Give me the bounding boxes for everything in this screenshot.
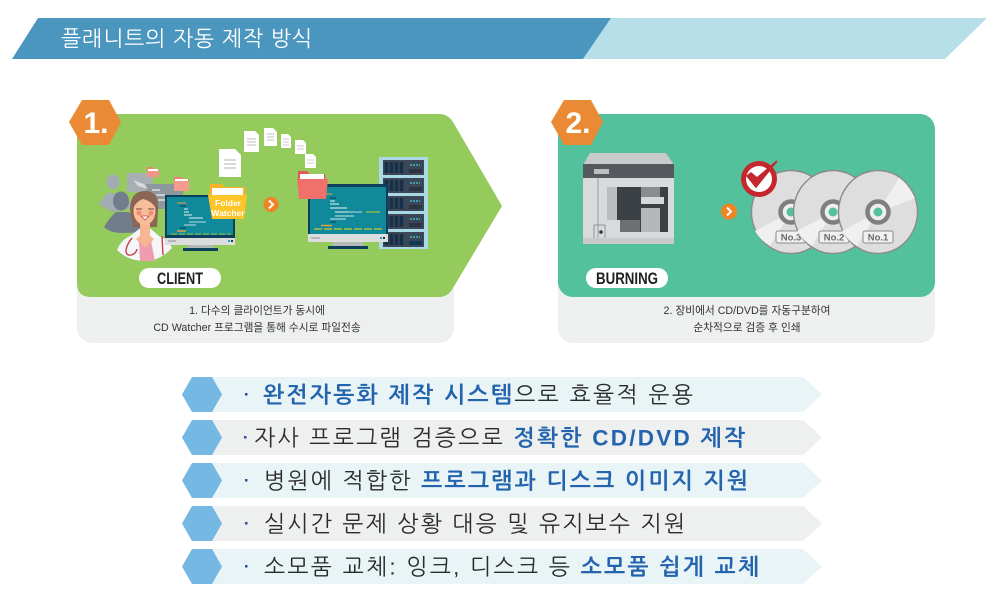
icon: doctor (117, 191, 172, 261)
label: burning: BURNING (596, 270, 658, 288)
icon: client silhouettes (99, 174, 150, 233)
icon: arrow (721, 204, 737, 220)
label: client (139, 268, 221, 288)
benefit row 3 (182, 463, 822, 498)
icon: client monitor (165, 195, 235, 251)
benefit row 5 (182, 549, 822, 584)
benefit row 4: 실시간 문제 상황 대응 및 유지보수 지원 (264, 512, 685, 536)
icon: background screens (127, 173, 183, 209)
icon: server monitor (308, 184, 388, 249)
badge: step 2 (551, 100, 603, 145)
icon: disc publisher (583, 153, 674, 244)
icon: arrow (264, 197, 278, 212)
icon: red folder (297, 171, 328, 199)
icon: disc no.2: No.2 (824, 232, 844, 244)
benefit row 2: 자사 프로그램 검증으로 정확한 CD/DVD 제작 (254, 426, 745, 450)
benefit row 1: 완전자동화 제작 시스템으로 효율적 운용 (263, 382, 693, 408)
caption: burning (664, 304, 830, 334)
icon: disc no.1 (838, 170, 918, 254)
benefit row 2 (182, 420, 822, 455)
icon: small pink folders (147, 167, 189, 191)
icon: disc no.3 (752, 170, 830, 254)
caption: burning: 순차적으로 검증 후 인쇄 (693, 322, 801, 334)
benefit row 1 (182, 377, 822, 412)
caption: client: CD Watcher 프로그램을 통해 수시로 파일전송 (153, 321, 361, 334)
caption: burning: 2. 장비에서 CD/DVD를 자동구분하여 (664, 304, 830, 317)
icon: flying documents (219, 128, 316, 177)
icon: server rack (379, 157, 428, 249)
icon: disc no.2 (794, 170, 872, 254)
caption: client (153, 305, 361, 334)
benefit row 5: 소모품 교체: 잉크, 디스크 등 소모품 쉽게 교체 (264, 554, 759, 580)
caption: client: 1. 다수의 클라이언트가 동시에 (189, 305, 325, 317)
panel: client (69, 100, 502, 343)
icon: disc no.1: No.1 (868, 232, 889, 244)
benefit row 3: 병원에 적합한 프로그램과 디스크 이미지 지원 (264, 468, 748, 494)
badge: step 2: 2. (565, 107, 591, 140)
panel: burning (551, 100, 935, 343)
icon: folder watcher: Watcher (211, 208, 245, 218)
benefit row 4 (182, 506, 822, 541)
badge: step 1: 1. (83, 107, 109, 140)
heading: 플래니트의 자동 제작 방식 (61, 27, 312, 51)
label: client: CLIENT (157, 270, 203, 288)
icon: folder watcher (208, 184, 247, 219)
icon: disc no.3: No.3 (781, 232, 801, 244)
badge: step 1 (69, 100, 121, 145)
icon: folder watcher: Folder (215, 198, 242, 208)
header banner (12, 18, 987, 59)
icon: check mark (741, 161, 777, 197)
